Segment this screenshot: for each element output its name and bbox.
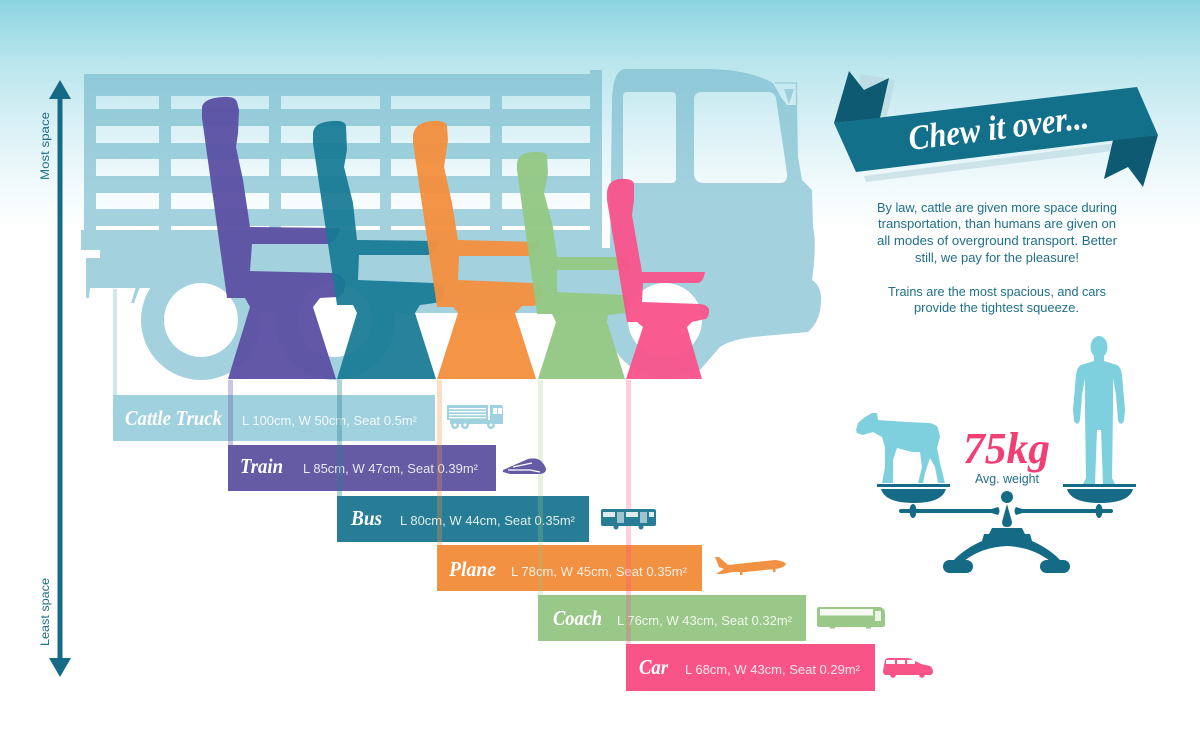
- icon: truck: [447, 405, 503, 429]
- bar: bus: [337, 496, 589, 542]
- icon: car: [883, 658, 933, 678]
- icon: plane: [715, 557, 786, 575]
- balance scale: [877, 484, 1136, 573]
- seat: bus: [313, 121, 444, 379]
- bar: train: [228, 445, 496, 491]
- bar: plane: [437, 545, 702, 591]
- bar: coach: L 76cm, W 43cm, Seat 0.32m²: [617, 614, 792, 628]
- banner: chew it over: Chew it over...: [906, 97, 1091, 158]
- bar: cattle truck: L 100cm, W 50cm, Seat 0.5m²: [242, 414, 417, 428]
- bar: train: Train: [240, 454, 283, 478]
- text block: explanation: provide the tightest squeeze.: [914, 300, 1079, 315]
- text block: explanation: Trains are the most spacious, and cars: [888, 284, 1106, 299]
- cattle truck silhouette: [81, 69, 821, 380]
- seat: train: [202, 97, 345, 379]
- weight label: Avg. weight: [975, 471, 1039, 486]
- text block: explanation: transportation, than humans are given on: [878, 216, 1116, 231]
- bar: coach: [538, 595, 806, 641]
- bar: car: Car: [639, 655, 669, 679]
- bar: bus: L 80cm, W 44cm, Seat 0.35m²: [400, 514, 575, 528]
- seat: plane: [413, 121, 543, 379]
- bar: cattle truck: Cattle Truck: [125, 406, 222, 430]
- icon: calf: [856, 413, 945, 483]
- bar: car: L 68cm, W 43cm, Seat 0.29m²: [685, 663, 860, 677]
- seat: car: [607, 179, 709, 379]
- bar: plane: Plane: [448, 557, 496, 581]
- bar: cattle truck: [113, 395, 435, 441]
- banner: chew it over: [834, 71, 1158, 187]
- bar: plane: L 78cm, W 45cm, Seat 0.35m²: [511, 565, 687, 579]
- text block: explanation: all modes of overground transport. Better: [877, 233, 1118, 248]
- weight label: 75kg: [963, 424, 1050, 473]
- bar: train: L 85cm, W 47cm, Seat 0.39m²: [303, 462, 478, 476]
- axis label: most space: Most space: [38, 112, 52, 180]
- icon: coach: [817, 607, 885, 628]
- icon: human figure: [1073, 336, 1125, 484]
- seat: coach: [517, 152, 630, 379]
- axis arrow: most to least space: [49, 80, 71, 677]
- text block: explanation: still, we pay for the pleasure!: [915, 250, 1079, 265]
- text block: explanation: By law, cattle are given more space during: [877, 200, 1117, 215]
- bar: bus: Bus: [350, 506, 382, 530]
- bar: car: [626, 644, 875, 691]
- bar: coach: Coach: [553, 606, 602, 630]
- axis label: least space: Least space: [38, 578, 52, 646]
- text block: explanation: [877, 200, 1118, 315]
- icon: train: [503, 458, 546, 474]
- icon: bus: [601, 509, 656, 530]
